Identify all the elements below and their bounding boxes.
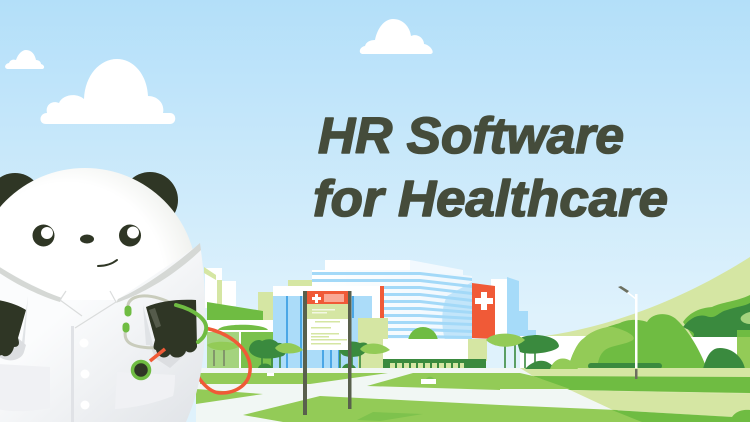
ground [196, 368, 750, 422]
white wall behind right bushes [690, 337, 737, 370]
panda head [0, 168, 197, 392]
paw highlight [149, 308, 161, 328]
street lamp [618, 286, 638, 372]
front glass block [273, 286, 384, 368]
right hospital wing [491, 277, 536, 340]
stethoscope green tube [176, 305, 206, 342]
white wall behind left bushes [520, 336, 600, 370]
left building group [204, 267, 273, 370]
red stethoscope tube [186, 328, 250, 393]
sleeve shadows [22, 296, 153, 350]
chest piece [132, 349, 165, 378]
panda coat [0, 244, 205, 422]
panda [0, 168, 206, 422]
paw shadows [0, 338, 190, 368]
right pocket [115, 372, 175, 409]
hospital main tower [288, 260, 472, 340]
lamp base [635, 369, 638, 379]
panda mouth [98, 260, 117, 266]
background hill [545, 257, 750, 375]
coat collars [0, 243, 201, 328]
left pocket [0, 364, 50, 411]
panda ears [0, 172, 178, 228]
placket shadow and buttons [71, 326, 90, 422]
right bushes [568, 295, 750, 369]
cloud: top center [360, 19, 433, 54]
red cross banner [472, 283, 495, 339]
panda eyes [32, 224, 141, 246]
right paw [146, 300, 197, 358]
left paw [0, 300, 26, 356]
title [313, 107, 668, 227]
cloud: large [40, 59, 175, 124]
title: for Healthcare [313, 170, 668, 227]
podium and dome [358, 318, 487, 370]
trees [207, 334, 578, 369]
signpost [303, 291, 352, 415]
panda nose [80, 234, 94, 244]
cloud: small left [5, 50, 44, 69]
stethoscope earpieces [125, 296, 175, 348]
title: HR Software [318, 107, 624, 164]
